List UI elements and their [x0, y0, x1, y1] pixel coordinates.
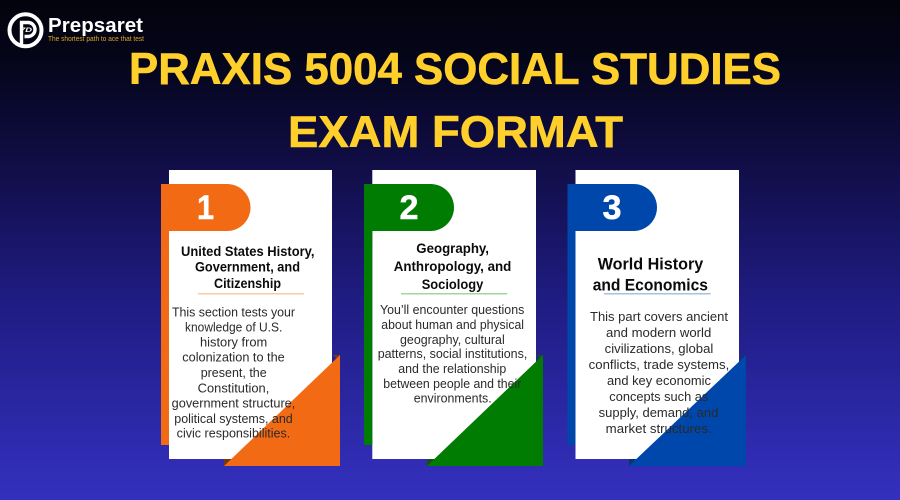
- card heading: United States History,: [181, 244, 314, 259]
- card body text: patterns, social institutions,: [378, 347, 527, 361]
- card body text: You’ll encounter questions: [380, 303, 524, 317]
- title: EXAM FORMAT: [288, 108, 623, 157]
- card body text: and the relationship: [398, 362, 506, 376]
- card body text: market structures.: [606, 422, 712, 436]
- title: PRAXIS 5004 SOCIAL STUDIES: [129, 45, 781, 94]
- logo: [10, 14, 144, 46]
- card body text: colonization to the: [182, 351, 285, 365]
- card body text: geography, cultural: [400, 333, 505, 347]
- card heading: and Economics: [593, 276, 708, 294]
- card heading: Government, and: [195, 260, 300, 274]
- card heading: Geography,: [416, 241, 489, 256]
- panel: card 1: [161, 170, 340, 466]
- number: 1: [197, 189, 214, 227]
- number tab: [568, 184, 657, 231]
- card body text: [378, 303, 527, 406]
- card body text: conflicts, trade systems,: [589, 358, 729, 372]
- left accent strip: [161, 184, 169, 445]
- card background: [576, 170, 739, 459]
- icon: logo mark: 7D: [20, 28, 33, 34]
- card body text: between people and their: [383, 377, 521, 391]
- card body text: [172, 306, 295, 441]
- card body text: about human and physical: [381, 318, 524, 332]
- title: [129, 45, 781, 157]
- card body text: This part covers ancient: [590, 310, 729, 324]
- panel: card 2: [364, 170, 543, 466]
- card body text: civic responsibilities.: [177, 427, 290, 441]
- card body text: political systems, and: [174, 412, 293, 426]
- card body text: knowledge of U.S.: [185, 321, 282, 335]
- card heading: World History: [598, 255, 704, 273]
- card heading: [394, 241, 511, 292]
- card heading: [181, 244, 314, 291]
- card body text: civilizations, global: [605, 342, 713, 356]
- card body text: and key economic: [607, 374, 711, 388]
- left accent strip: [568, 184, 576, 445]
- corner triangle: [629, 355, 746, 466]
- card body text: environments.: [414, 392, 492, 406]
- card body text: This section tests your: [172, 306, 295, 320]
- card heading: Anthropology, and: [394, 259, 511, 274]
- card background: [372, 170, 536, 459]
- number: 3: [602, 189, 622, 227]
- card body text: present, the: [201, 366, 267, 380]
- card heading: Citizenship: [214, 276, 281, 291]
- card body text: supply, demand, and: [599, 406, 718, 420]
- number: 2: [400, 189, 418, 227]
- card body text: government structure,: [172, 397, 295, 411]
- card background: [169, 170, 332, 459]
- card heading: [593, 255, 708, 294]
- card body text: Constitution,: [198, 382, 269, 396]
- card body text: history from: [200, 336, 267, 350]
- corner triangle: [224, 355, 340, 466]
- logo tagline: The shortest path to ace that test: [48, 36, 144, 43]
- card body text: concepts such as: [609, 390, 708, 404]
- card body text: and modern world: [606, 326, 711, 340]
- card body text: [589, 310, 729, 436]
- number tab: [364, 184, 454, 231]
- number tab: [161, 184, 250, 231]
- logo name: Prepsaret: [48, 14, 143, 37]
- panel: card 3: [568, 170, 746, 466]
- left accent strip: [364, 184, 372, 445]
- card heading: Sociology: [422, 277, 484, 292]
- corner triangle: [427, 355, 543, 466]
